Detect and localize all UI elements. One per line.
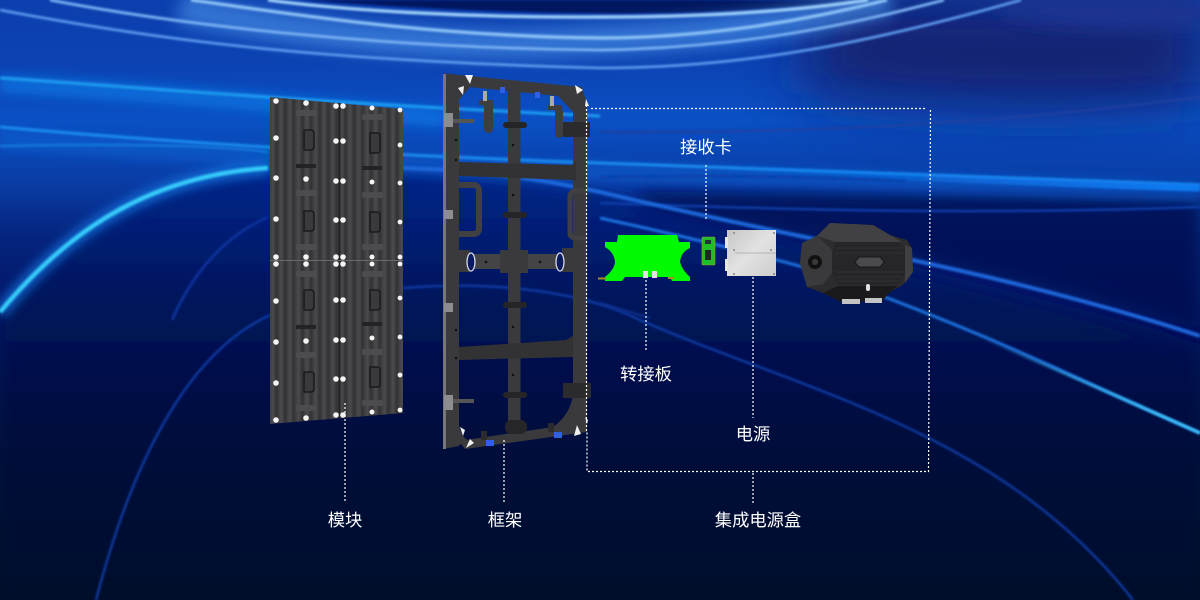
frame corners and plates [444,75,589,448]
frame rails and bars [443,73,587,449]
panel: module [270,97,403,424]
frame blue clips [486,87,562,446]
panel: receiving card [702,237,715,265]
middle light streaks [0,78,1200,211]
panel: adapter board [598,235,690,281]
module screw dots [273,98,402,423]
label: module: 模块 [328,510,362,530]
frame handles [459,185,587,271]
frame hanging hooks and boxes [453,91,591,440]
label: receiving card: 接收卡 [680,137,732,157]
label: integrated power box: 集成电源盒 [715,510,801,530]
panel: integrated power box [800,223,913,304]
panel: power supply [725,230,776,276]
label: frame: 框架 [488,510,522,530]
label: power supply: 电源 [736,424,770,444]
frame cross hub and end flanges [458,248,574,273]
module plates and handles [296,110,383,411]
sweeping curves [0,168,1200,600]
leader lines [345,105,930,503]
panel: frame [443,73,591,449]
top light streaks [0,0,1021,68]
frame bolt holes [455,139,541,376]
label: adapter board: 转接板 [620,364,672,384]
